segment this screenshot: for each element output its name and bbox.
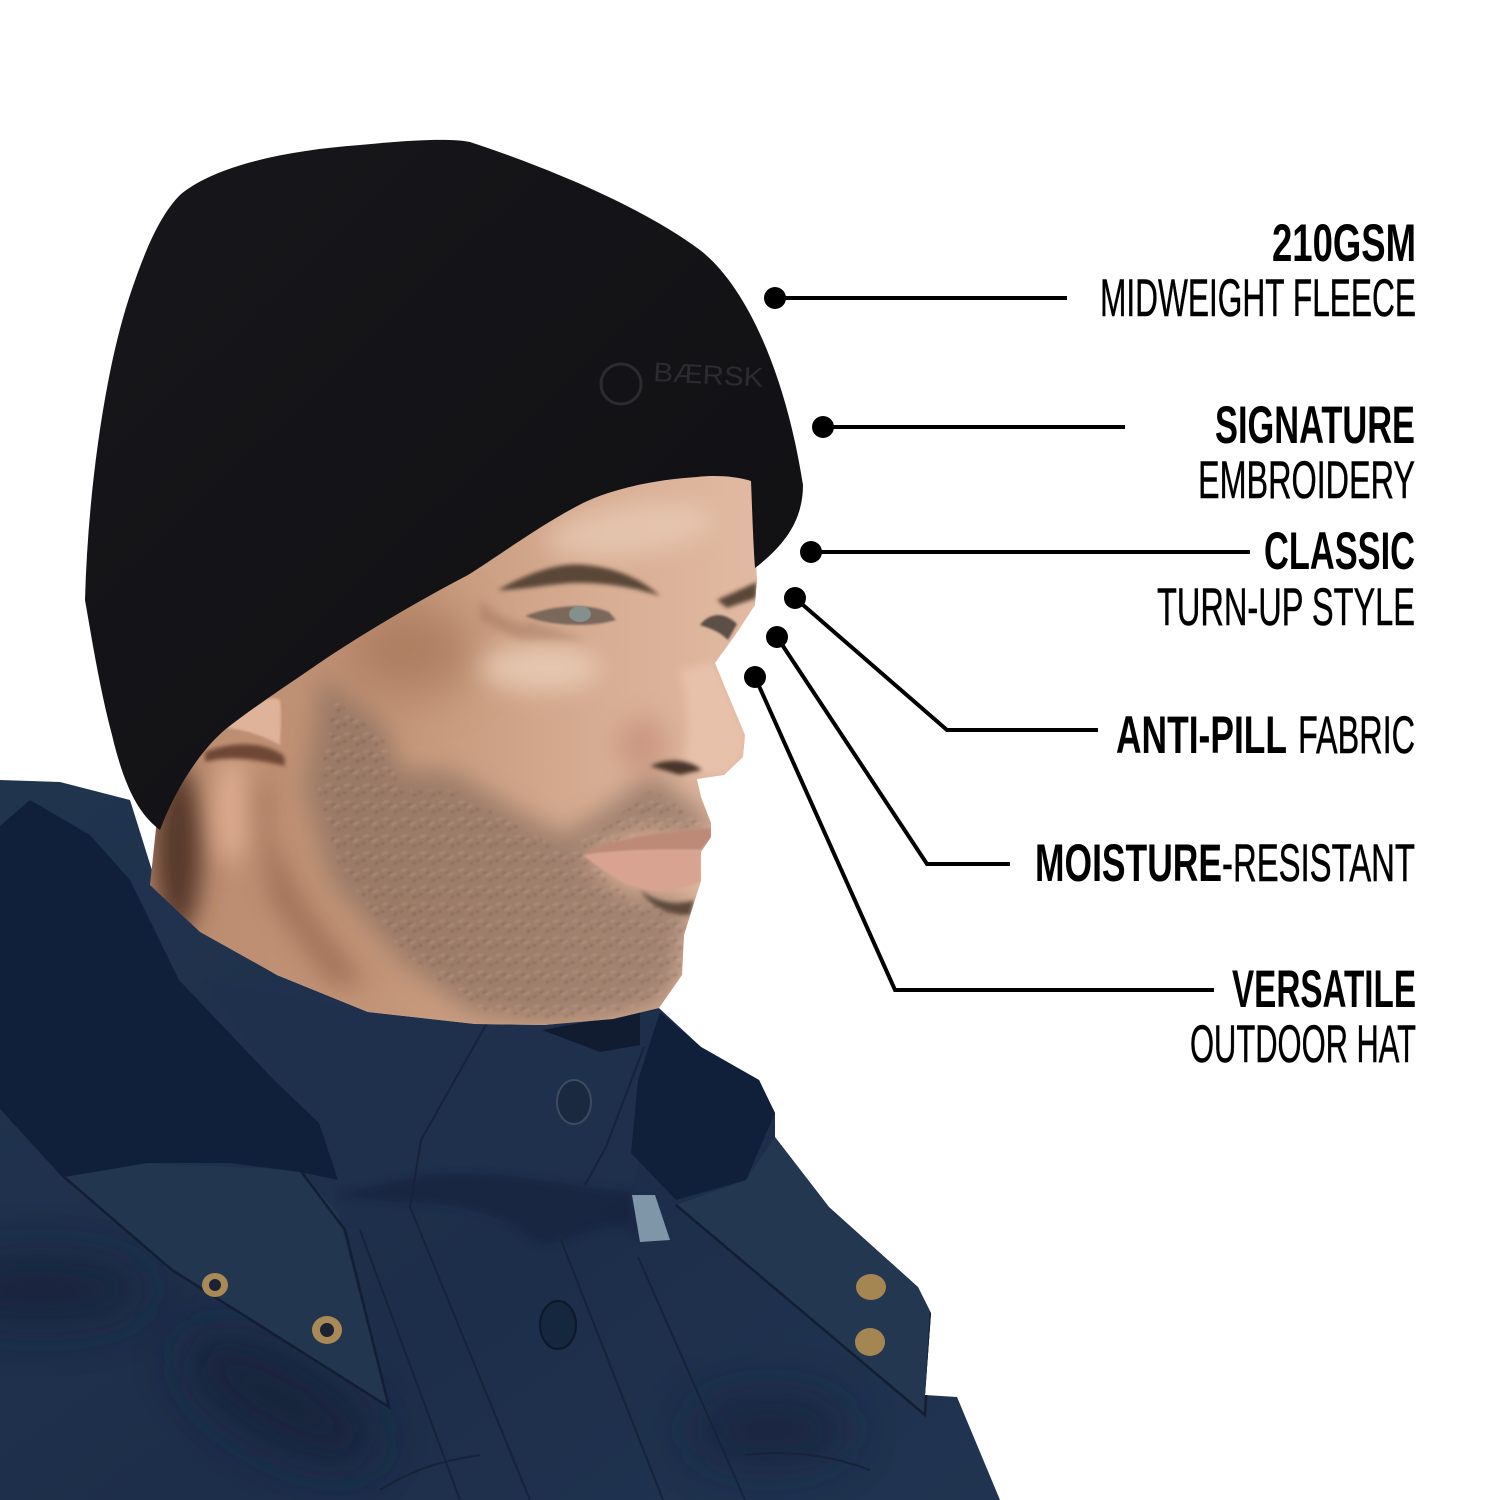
nose	[680, 663, 745, 775]
eye near	[525, 606, 616, 625]
eye far	[700, 615, 737, 640]
standing collar	[367, 1012, 534, 1025]
cheek highlight	[480, 644, 600, 692]
brow near	[498, 564, 660, 596]
fur collar left	[0, 800, 338, 1180]
callout: anti-pill fabric: FABRIC	[1298, 706, 1415, 765]
temple shadow	[345, 605, 475, 695]
wrinkle shadow	[479, 604, 580, 642]
neck and face	[150, 470, 762, 1025]
seams	[0, 1107, 389, 1407]
right lapel	[676, 1137, 931, 1415]
callout: moisture-resistant: MOISTURE	[1035, 834, 1222, 893]
callout: 210GSM midweight fleece: 210GSM	[1272, 214, 1416, 273]
callout: versatile outdoor hat	[744, 666, 1416, 1074]
ear	[227, 698, 281, 745]
callout: anti-pill fabric	[784, 587, 1415, 765]
fur collar right	[631, 1012, 775, 1200]
callout: classic turn-up style	[800, 522, 1415, 637]
left lapel	[132, 1233, 386, 1404]
mouth	[583, 828, 711, 855]
shoulder shadow	[192, 1336, 368, 1464]
callout: signature embroidery	[812, 396, 1415, 510]
logo embroidery	[601, 357, 764, 404]
neck shading	[154, 765, 202, 935]
jacket body	[0, 780, 1000, 1500]
callout: classic turn-up style: CLASSIC	[1264, 522, 1415, 581]
photo: man wearing fleece hat	[0, 140, 1000, 1500]
forehead highlight	[544, 499, 708, 562]
stubble	[305, 677, 711, 1025]
brow far	[717, 582, 757, 608]
callout: anti-pill fabric: ANTI-PILL	[1116, 706, 1287, 765]
fleece hat	[85, 140, 803, 830]
jacket snaps and eyelets	[202, 1080, 886, 1356]
callout: moisture-resistant	[766, 626, 1415, 893]
logo embroidery: BÆRSK	[653, 357, 764, 393]
callout: 210GSM midweight fleece	[764, 214, 1416, 328]
